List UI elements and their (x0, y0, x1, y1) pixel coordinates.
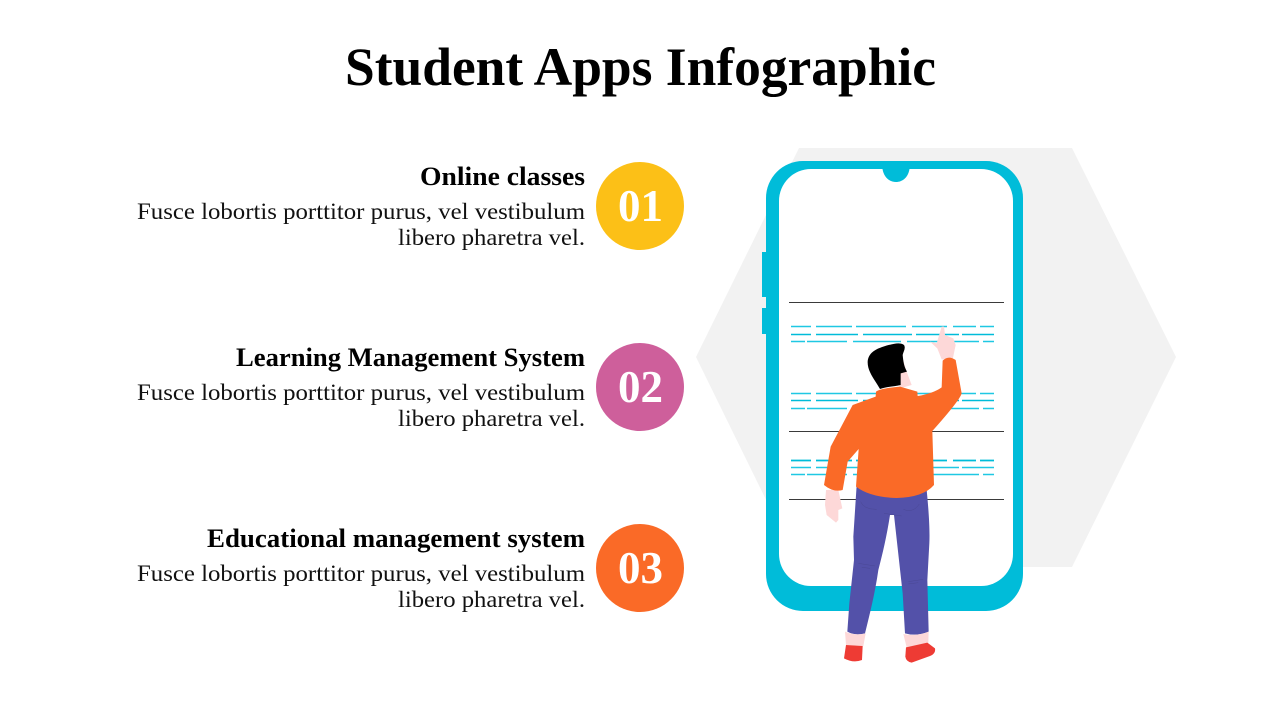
text block: item 2 description: Fusce lobortis porttitor purus, vel vestibulum (137, 380, 585, 405)
number badge 02: 02 (618, 361, 663, 412)
text block: item 3 description (137, 561, 585, 612)
text block: item 2 description: libero pharetra vel. (398, 406, 585, 431)
text block: item 1 description: Fusce lobortis porttitor purus, vel vestibulum (137, 199, 585, 224)
list item 2: learning management system (137, 343, 684, 431)
head, hand and jacket (824, 327, 962, 498)
heading: online classes: Online classes (420, 162, 585, 191)
text block: item 1 description: libero pharetra vel. (398, 225, 585, 250)
number badge 03: 03 (618, 542, 663, 593)
number badge 03 (596, 524, 684, 612)
background hexagon (696, 148, 1176, 567)
number badge 01 (596, 162, 684, 250)
on-screen text lines (789, 302, 1004, 500)
heading: educational management system: Educational management system (207, 524, 585, 553)
icon: smartphone (762, 161, 1023, 611)
text block: item 3 description: Fusce lobortis porttitor purus, vel vestibulum (137, 561, 585, 586)
title: Student Apps Infographic (345, 37, 936, 97)
text block: item 1 description (137, 199, 585, 250)
list item 1: online classes (137, 162, 684, 250)
text block: item 3 description: libero pharetra vel. (398, 587, 585, 612)
legs and shoes (825, 485, 935, 663)
list item 3: educational management system (137, 524, 684, 612)
heading: learning management system: Learning Management System (236, 343, 585, 372)
number badge 01: 01 (618, 180, 663, 231)
text block: item 2 description (137, 380, 585, 431)
illustration: student pointing at phone (824, 327, 962, 663)
number badge 02 (596, 343, 684, 431)
